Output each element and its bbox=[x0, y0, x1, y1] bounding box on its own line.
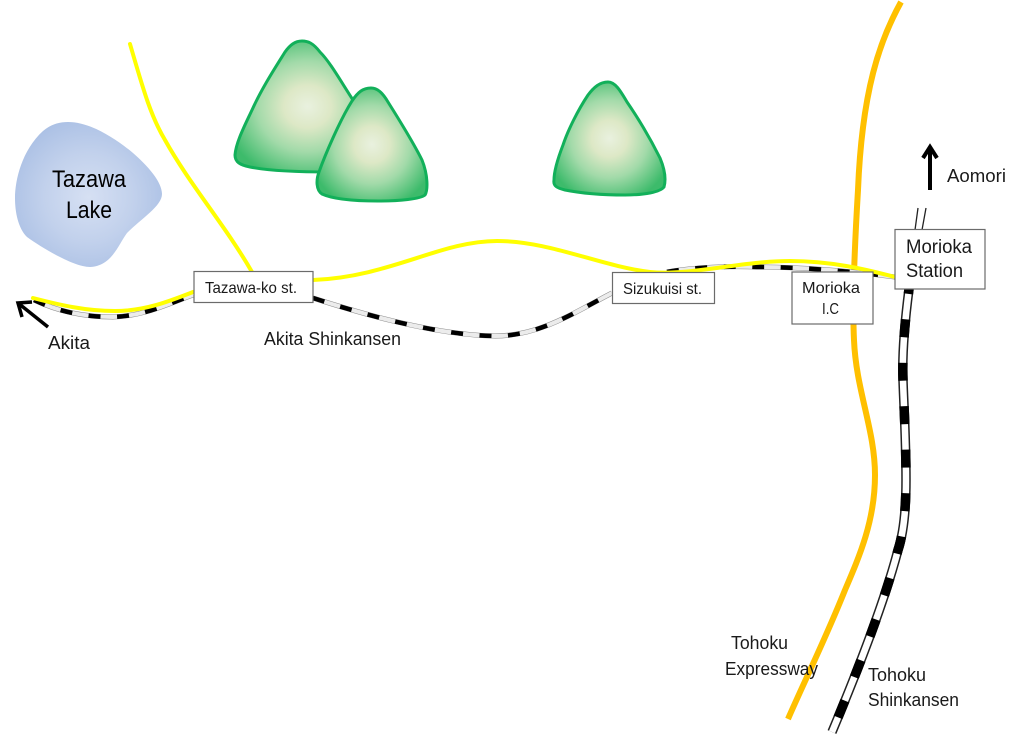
mountain: right peak bbox=[554, 82, 665, 195]
label: Tohoku Shinkansen: Shinkansen bbox=[868, 690, 959, 710]
station box: Morioka Station: Station bbox=[906, 261, 963, 282]
station box: Sizukuisi st.: Sizukuisi st. bbox=[623, 281, 702, 298]
station box: Tazawa-ko st. bbox=[194, 272, 313, 302]
station box: Morioka Station bbox=[895, 230, 985, 289]
Tohoku Expressway road bbox=[788, 2, 901, 719]
interchange box: Morioka I.C bbox=[792, 272, 873, 324]
arrow: to Akita bbox=[18, 302, 48, 327]
station box: Morioka Station: Morioka bbox=[906, 237, 972, 258]
mountain: large left peak bbox=[235, 41, 380, 172]
label: Tohoku Expressway bbox=[725, 633, 818, 679]
Yellow road bbox=[33, 44, 895, 311]
station box: Sizukuisi st. bbox=[612, 272, 714, 304]
label: Tohoku Expressway: Expressway bbox=[725, 659, 818, 679]
station box: Tazawa-ko st.: Tazawa-ko st. bbox=[205, 280, 297, 297]
label: Tohoku Shinkansen: Tohoku bbox=[868, 665, 926, 685]
Tohoku Shinkansen rail line bbox=[832, 208, 926, 732]
label: Tohoku Shinkansen bbox=[868, 665, 959, 710]
lake: Tazawa Lake: Tazawa bbox=[52, 166, 127, 193]
label: Tohoku Expressway: Tohoku bbox=[731, 633, 788, 653]
label: Aomori: Aomori bbox=[947, 166, 1006, 186]
lake: Tazawa Lake bbox=[15, 122, 162, 267]
arrow: to Aomori bbox=[923, 147, 937, 190]
mountain: small front peak bbox=[317, 88, 427, 201]
interchange box: Morioka I.C: I.C bbox=[822, 301, 839, 318]
label: Akita: Akita bbox=[48, 333, 91, 353]
label: Akita Shinkansen: Akita Shinkansen bbox=[264, 329, 401, 349]
lake: Tazawa Lake: Lake bbox=[66, 197, 112, 224]
Akita Shinkansen rail line bbox=[34, 267, 895, 336]
interchange box: Morioka I.C: Morioka bbox=[802, 280, 860, 297]
